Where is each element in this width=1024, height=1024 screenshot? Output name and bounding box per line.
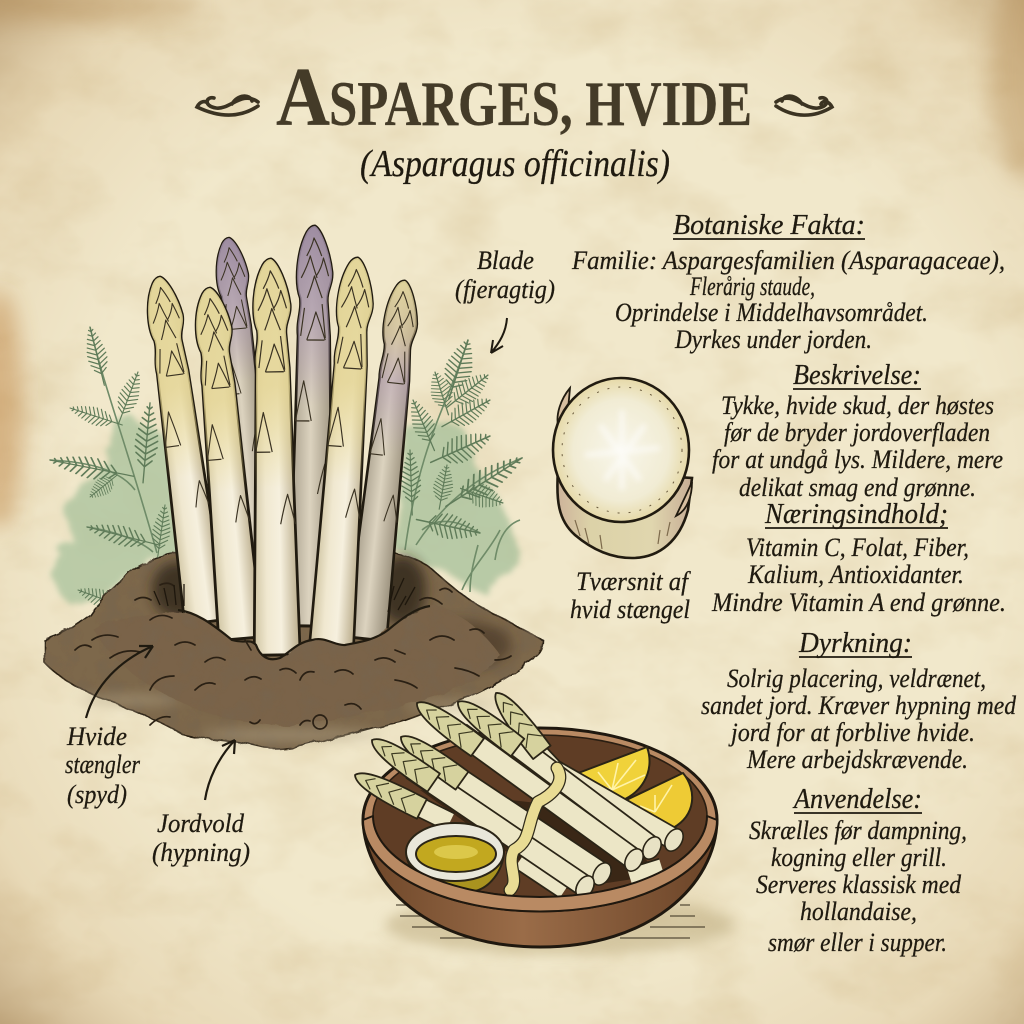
shadow under bundle xyxy=(420,790,660,890)
arrow: to leaves xyxy=(491,318,507,353)
text block: nutrition xyxy=(711,498,1006,617)
arrow: to stalks xyxy=(86,646,153,718)
green wash xyxy=(55,416,520,605)
bowl rim xyxy=(363,728,717,911)
spear: short end xyxy=(630,868,662,878)
text block: usage: Anvendelse: xyxy=(792,783,922,815)
text block: usage: smør eller i supper. xyxy=(768,928,947,957)
label: earth mound: (hypning) xyxy=(152,838,250,867)
text block: cultivation: Solrig placering, veldrænet, xyxy=(727,664,986,693)
asparagus tips xyxy=(350,686,551,819)
text block: nutrition: Kalium, Antioxidanter. xyxy=(747,560,964,589)
text block: cultivation: Mere arbejdskrævende. xyxy=(746,745,968,774)
subtitle: (Asparagus officinalis) xyxy=(360,143,670,185)
label: cross-section: Tværsnit af xyxy=(576,567,692,596)
text block: cultivation: jord for at forblive hvide. xyxy=(728,718,975,747)
bowl interior xyxy=(373,735,707,897)
label: white stalks: (spyd) xyxy=(67,780,127,809)
cut ends xyxy=(572,826,687,901)
label: leaves xyxy=(455,246,555,353)
text block: botanical facts: Flerårig staude, xyxy=(689,272,815,301)
label: leaves: (fjeragtig) xyxy=(455,275,555,304)
spear 4 xyxy=(248,259,300,655)
illustration: soil in front of spear bases xyxy=(75,578,511,729)
label: white stalks xyxy=(65,646,153,809)
text block: nutrition: Vitamin C, Folat, Fiber, xyxy=(746,533,969,562)
label: earth mound: Jordvold xyxy=(157,809,245,838)
spear 6 xyxy=(310,257,380,647)
dipping dish xyxy=(406,823,504,892)
title: SPARGES, HVIDE xyxy=(329,68,752,139)
illustration: ferns behind the spears xyxy=(48,325,528,615)
text block: cultivation: Dyrkning: xyxy=(798,627,912,659)
text block: description xyxy=(712,359,1003,502)
label: earth mound xyxy=(152,740,250,867)
spear 3 xyxy=(210,236,276,558)
text block: botanical facts xyxy=(571,209,1005,354)
spear: fifth xyxy=(412,769,583,885)
text block: usage: kogning eller grill. xyxy=(771,843,947,872)
front rim xyxy=(363,816,717,911)
text block: usage xyxy=(749,783,967,957)
spear 5 xyxy=(289,226,337,626)
text block: botanical facts: Familie: Aspargesfamilien (Asparagaceae), xyxy=(571,246,1005,275)
text block: description: Tykke, hvide skud, der høstes xyxy=(721,391,994,420)
illustration: soil mound xyxy=(44,553,543,748)
text block: usage: hollandaise, xyxy=(800,897,917,926)
arrow: to mound xyxy=(205,740,235,800)
ornament: left flourish xyxy=(197,96,258,115)
text block: description: delikat smag end grønne. xyxy=(739,473,976,502)
illustration: front white spears xyxy=(139,257,425,655)
text block: nutrition: Næringsindhold; xyxy=(764,498,948,530)
illustration: soil shading xyxy=(80,556,512,742)
bowl shadow xyxy=(385,895,735,955)
label: leaves: Blade xyxy=(477,246,534,275)
spear 2 xyxy=(188,286,263,641)
asparagus bundle xyxy=(350,686,672,890)
spear: low hidden xyxy=(520,860,565,890)
spear 1 xyxy=(139,274,227,625)
hole hatching xyxy=(154,578,415,612)
label: cross-section xyxy=(570,567,692,624)
sauce ribbon xyxy=(510,768,560,890)
soil marks xyxy=(75,583,511,725)
spear: front left xyxy=(395,795,450,822)
lemon wedges xyxy=(573,747,692,828)
spear: third xyxy=(460,733,632,858)
spear: rear right xyxy=(520,735,672,838)
spear: second xyxy=(500,733,650,846)
label: white stalks: Hvide xyxy=(66,722,127,751)
title xyxy=(197,51,832,144)
text block: usage: Skrælles før dampning, xyxy=(749,816,967,845)
text block: cultivation xyxy=(701,627,1017,774)
label: cross-section: hvid stængel xyxy=(570,595,690,624)
title: A xyxy=(276,51,330,144)
illustration: bowl with asparagus xyxy=(350,686,735,955)
illustration: back purple spears xyxy=(210,226,337,626)
bowl body xyxy=(363,820,717,947)
text block: botanical facts: Oprindelse i Middelhavsområdet. xyxy=(615,298,928,327)
text block: usage: Serveres klassisk med xyxy=(756,870,962,899)
ornament: right flourish xyxy=(776,96,832,115)
spear: fourth xyxy=(442,767,600,872)
text block: description: før de bryder jordoverfladen xyxy=(724,418,990,447)
text block: description: Beskrivelse: xyxy=(793,359,921,391)
text block: botanical facts: Dyrkes under jorden. xyxy=(674,325,872,354)
text block: nutrition: Mindre Vitamin A end grønne. xyxy=(711,588,1006,617)
label: white stalks: stængler xyxy=(65,750,141,779)
spear 7 xyxy=(346,279,425,641)
text block: botanical facts: Botaniske Fakta: xyxy=(673,209,865,241)
cross-section of stalk xyxy=(553,378,692,558)
